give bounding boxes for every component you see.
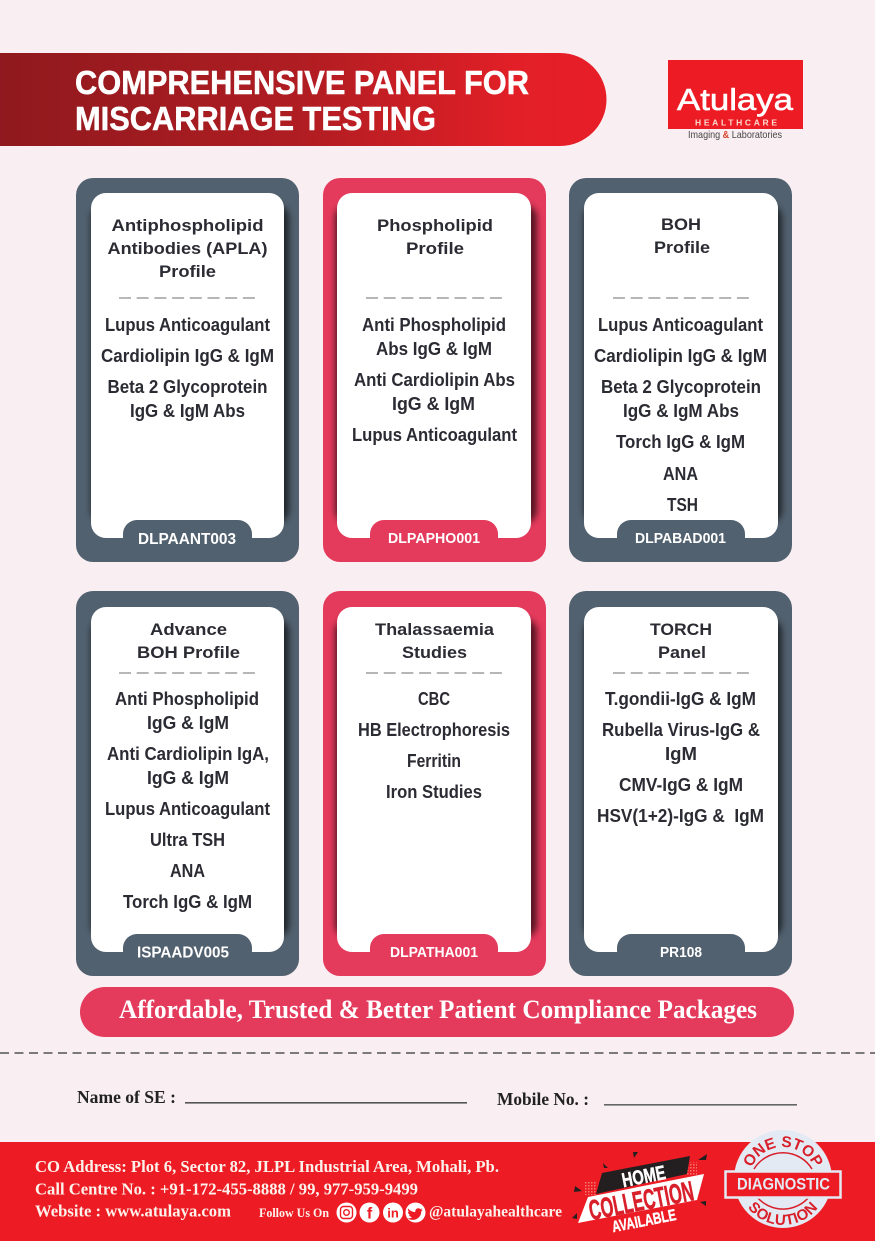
badge: one stop diagnostic solution: ONE STOP bbox=[744, 1136, 822, 1166]
test list bbox=[594, 315, 767, 515]
heading: Profile bbox=[406, 239, 464, 258]
icon: instagram bbox=[336, 1202, 356, 1222]
test list: HSV(1+2)-IgG & IgM bbox=[597, 806, 764, 826]
test list: Anti Phospholipid bbox=[115, 689, 259, 709]
social links bbox=[259, 1202, 562, 1222]
contact details: CO Address: Plot 6, Sector 82, JLPL Industrial Area, Mohali, Pb. bbox=[35, 1157, 499, 1176]
heading: BOH bbox=[661, 215, 701, 234]
title: MISCARRIAGE TESTING bbox=[75, 100, 436, 137]
test list: IgM bbox=[665, 744, 697, 764]
heading: Studies bbox=[402, 643, 467, 662]
code tab bbox=[617, 520, 745, 547]
code tab: PR108 bbox=[660, 945, 702, 961]
badge: home collection available: HOME bbox=[620, 1162, 668, 1192]
icon: facebook bbox=[360, 1202, 380, 1222]
test list: Abs IgG & IgM bbox=[376, 339, 492, 359]
heading: Thalassaemia bbox=[375, 620, 495, 639]
test list: Lupus Anticoagulant bbox=[105, 315, 270, 335]
code tab: DLPAPHO001 bbox=[388, 531, 480, 547]
heading: Antibodies (APLA) bbox=[108, 239, 268, 258]
heading bbox=[108, 216, 268, 281]
badge: home collection available: COLLECTION bbox=[586, 1175, 696, 1226]
heading bbox=[375, 620, 495, 662]
social links: Follow Us On bbox=[259, 1205, 330, 1220]
panel: Antiphospholipid Antibodies (APLA) Profile bbox=[76, 178, 299, 562]
test list: Ultra TSH bbox=[150, 830, 225, 850]
test list: TSH bbox=[667, 495, 698, 515]
test list: Anti Cardiolipin Abs bbox=[354, 370, 515, 390]
tagline banner: Affordable, Trusted & Better Patient Compliance Packages bbox=[119, 995, 757, 1024]
test list: ANA bbox=[170, 861, 205, 881]
test list: IgG & IgM bbox=[147, 713, 229, 733]
heading: Panel bbox=[658, 643, 706, 662]
form field: name of SE: Name of SE : bbox=[77, 1087, 176, 1107]
test list bbox=[352, 315, 517, 445]
heading: Antiphospholipid bbox=[112, 216, 264, 235]
test list bbox=[101, 315, 274, 421]
heading: Advance bbox=[150, 620, 227, 639]
heading bbox=[377, 216, 493, 258]
badge: home collection available bbox=[572, 1152, 707, 1236]
footer band bbox=[0, 1130, 875, 1241]
badge: one stop diagnostic solution: SOLUTION bbox=[749, 1202, 818, 1225]
heading: TORCH bbox=[650, 620, 712, 639]
logo: Atulaya Healthcare: HEALTHCARE bbox=[695, 118, 777, 128]
test list bbox=[105, 689, 270, 912]
test list: Beta 2 Glycoprotein bbox=[601, 377, 761, 397]
test list: IgG & IgM bbox=[147, 768, 229, 788]
heading bbox=[654, 215, 710, 257]
panel: Thalassaemia Studies bbox=[323, 591, 546, 976]
code tab: ISPAADV005 bbox=[137, 944, 229, 962]
logo: Atulaya Healthcare bbox=[668, 60, 803, 141]
tagline banner bbox=[80, 987, 794, 1037]
test list: Ferritin bbox=[407, 751, 461, 771]
test list: Anti Phospholipid bbox=[362, 315, 506, 335]
test list: HB Electrophoresis bbox=[358, 720, 510, 740]
panel: Phospholipid Profile bbox=[323, 178, 546, 562]
test list: Anti Cardiolipin IgA, bbox=[107, 744, 269, 764]
heading bbox=[137, 620, 240, 662]
code tab bbox=[370, 934, 498, 961]
code tab: DLPABAD001 bbox=[635, 531, 726, 547]
title bbox=[75, 64, 529, 137]
test list: ANA bbox=[663, 464, 698, 484]
test list: Lupus Anticoagulant bbox=[105, 799, 270, 819]
test list: Iron Studies bbox=[386, 782, 482, 802]
heading: Phospholipid bbox=[377, 216, 493, 235]
title: COMPREHENSIVE PANEL FOR bbox=[75, 64, 529, 101]
heading bbox=[650, 620, 712, 662]
logo: Atulaya Healthcare: Atulaya bbox=[677, 82, 794, 117]
test list: Torch IgG & IgM bbox=[123, 892, 252, 912]
test list: IgG & IgM Abs bbox=[623, 401, 739, 421]
code tab: DLPATHA001 bbox=[390, 945, 478, 961]
test list bbox=[358, 689, 510, 802]
icon: linkedin bbox=[383, 1202, 403, 1222]
contact details bbox=[35, 1157, 499, 1220]
badge: one stop diagnostic solution: DIAGNOSTIC bbox=[737, 1176, 830, 1194]
test list: CBC bbox=[418, 689, 450, 709]
contact details: Call Centre No. : +91-172-455-8888 / 99, 977-959-9499 bbox=[35, 1180, 418, 1198]
contact details: Website : www.atulaya.com bbox=[35, 1202, 231, 1220]
test list: IgG & IgM Abs bbox=[130, 401, 245, 421]
icon: twitter bbox=[406, 1202, 426, 1222]
icon: facebook: f bbox=[367, 1206, 373, 1222]
code tab bbox=[370, 520, 498, 547]
icon: linkedin: in bbox=[387, 1206, 399, 1220]
panel: BOH Profile bbox=[569, 178, 792, 562]
test list: Lupus Anticoagulant bbox=[352, 425, 517, 445]
badge: home collection available: AVAILABLE bbox=[611, 1207, 678, 1236]
heading: BOH Profile bbox=[137, 643, 240, 662]
code tab bbox=[617, 934, 745, 961]
code tab bbox=[123, 934, 252, 962]
badge: one stop diagnostic solution bbox=[724, 1130, 842, 1228]
logo: Atulaya Healthcare: Imaging & Laboratories bbox=[688, 129, 782, 141]
test list: Cardiolipin IgG & IgM bbox=[101, 346, 274, 366]
form field: mobile number: Mobile No. : bbox=[497, 1089, 589, 1109]
test list: IgG & IgM bbox=[392, 394, 475, 414]
heading: Profile bbox=[654, 238, 710, 257]
header banner bbox=[0, 53, 606, 146]
heading: Profile bbox=[159, 262, 216, 281]
social links: @atulayahealthcare bbox=[429, 1204, 562, 1220]
test list: T.gondii-IgG & IgM bbox=[605, 689, 756, 709]
test list: Lupus Anticoagulant bbox=[598, 315, 763, 335]
test list: Torch IgG & IgM bbox=[616, 432, 745, 452]
code tab bbox=[123, 520, 252, 548]
code tab: DLPAANT003 bbox=[138, 531, 236, 548]
test list: Beta 2 Glycoprotein bbox=[108, 377, 268, 397]
test list bbox=[597, 689, 764, 826]
test list: CMV-IgG & IgM bbox=[619, 775, 743, 795]
panel: TORCH Panel bbox=[569, 591, 792, 976]
test list: Rubella Virus-IgG & bbox=[602, 720, 760, 740]
panel: Advance BOH Profile bbox=[76, 591, 299, 976]
test list: Cardiolipin IgG & IgM bbox=[594, 346, 767, 366]
